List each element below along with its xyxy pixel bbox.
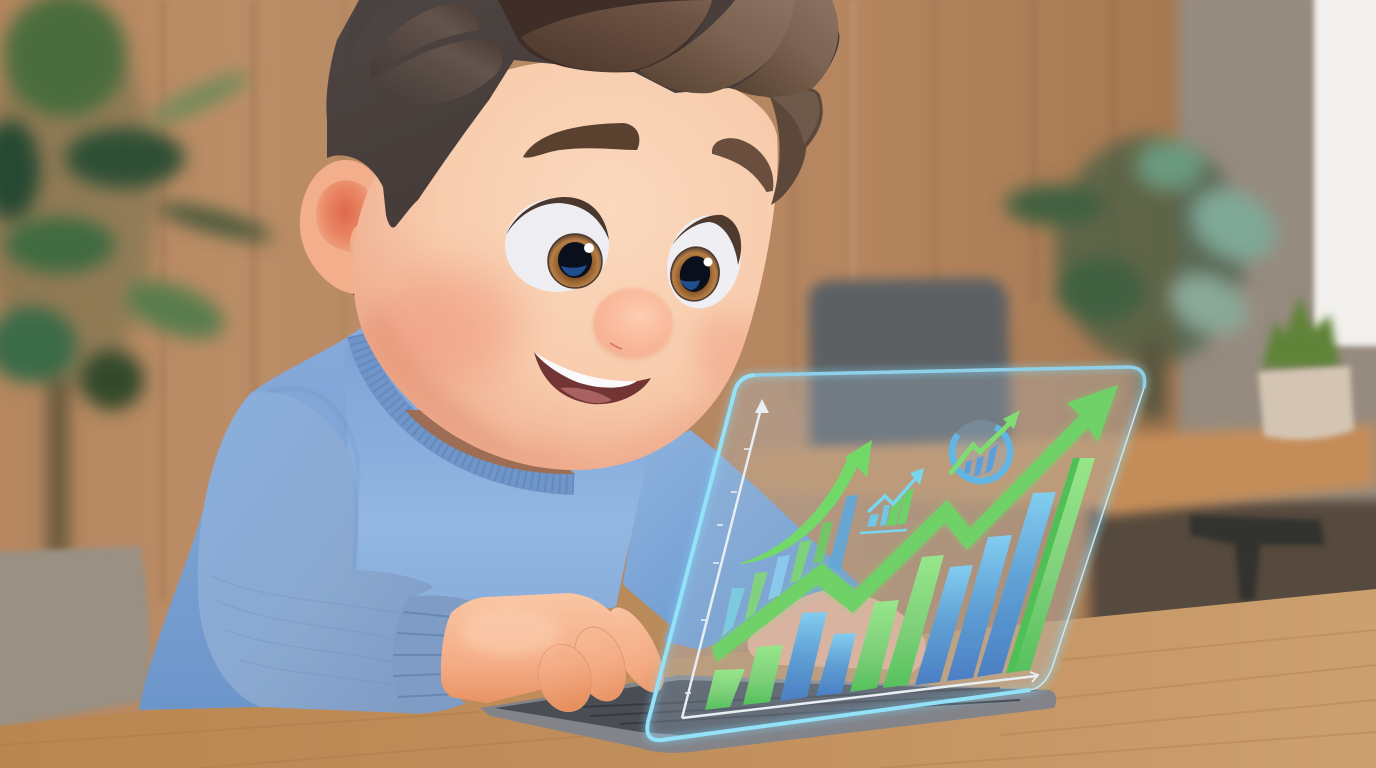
sleeve arm: [198, 392, 434, 713]
character: [139, 0, 860, 714]
dark hair base: [326, 0, 839, 228]
middle finger: [565, 620, 635, 708]
circular growth icon: [941, 410, 1021, 492]
upper left lobes: [344, 0, 400, 70]
holographic screen: [647, 367, 1145, 740]
glass frame glow: [647, 367, 1145, 740]
blue bar 4: [816, 633, 856, 696]
hand: [441, 593, 675, 717]
right side hair: [768, 86, 823, 205]
nose: [593, 288, 673, 360]
right grey wall: [1178, 0, 1376, 768]
axes: [682, 399, 1038, 718]
chair arm: [1190, 515, 1325, 600]
back of sweater: [139, 327, 420, 710]
neck shadow: [405, 410, 575, 474]
chest: [345, 345, 651, 640]
mouth: [534, 352, 651, 404]
blue bar 3: [780, 612, 827, 701]
blue bar 8: [947, 535, 1012, 681]
ring finger: [532, 639, 598, 717]
sweater: [139, 327, 860, 714]
window: [1314, 0, 1376, 346]
eye right: [657, 207, 751, 317]
palm: [441, 593, 625, 703]
back table: [745, 424, 1376, 516]
dark lower room: [1090, 500, 1376, 630]
small chart bars: [722, 495, 858, 637]
collar ribbing: [358, 335, 574, 484]
eyebrows: [523, 123, 772, 191]
wood gap under right arm: [616, 585, 670, 655]
glass panel: [647, 367, 1145, 740]
eye left: [505, 197, 609, 292]
main zigzag arrow: [712, 385, 1118, 662]
cheek blush: [380, 267, 520, 383]
green bar 6: [883, 555, 944, 688]
green bar 5: [850, 600, 899, 692]
small pot plant: [1258, 295, 1354, 440]
hair: [326, 0, 839, 228]
index finger: [597, 600, 675, 700]
green bar 10: [1006, 458, 1095, 673]
blue bar 9: [977, 492, 1056, 677]
small green curve arrow: [740, 440, 872, 564]
sleeve knit lines: [210, 575, 410, 685]
cuff: [393, 595, 478, 714]
chair back: [808, 278, 1012, 450]
plant left: [0, 0, 276, 560]
plant right: [1005, 135, 1289, 420]
ear: [300, 160, 392, 294]
other hand behind screen: [748, 590, 926, 674]
mini chart icon: [860, 468, 924, 533]
back hair under ear: [336, 266, 358, 299]
laptop base: [480, 675, 1056, 753]
shoulder seam: [268, 389, 358, 570]
glass frame: [755, 367, 1145, 388]
central lobe: [498, 0, 712, 72]
green bar 1: [705, 669, 745, 710]
head: [353, 60, 778, 490]
green bar 2: [743, 645, 783, 705]
desk: [0, 589, 1376, 768]
right lobes: [639, 0, 800, 93]
blue bar 7: [915, 565, 973, 685]
pot left: [0, 546, 150, 728]
right arm: [623, 430, 860, 650]
large bars: [705, 458, 1095, 710]
